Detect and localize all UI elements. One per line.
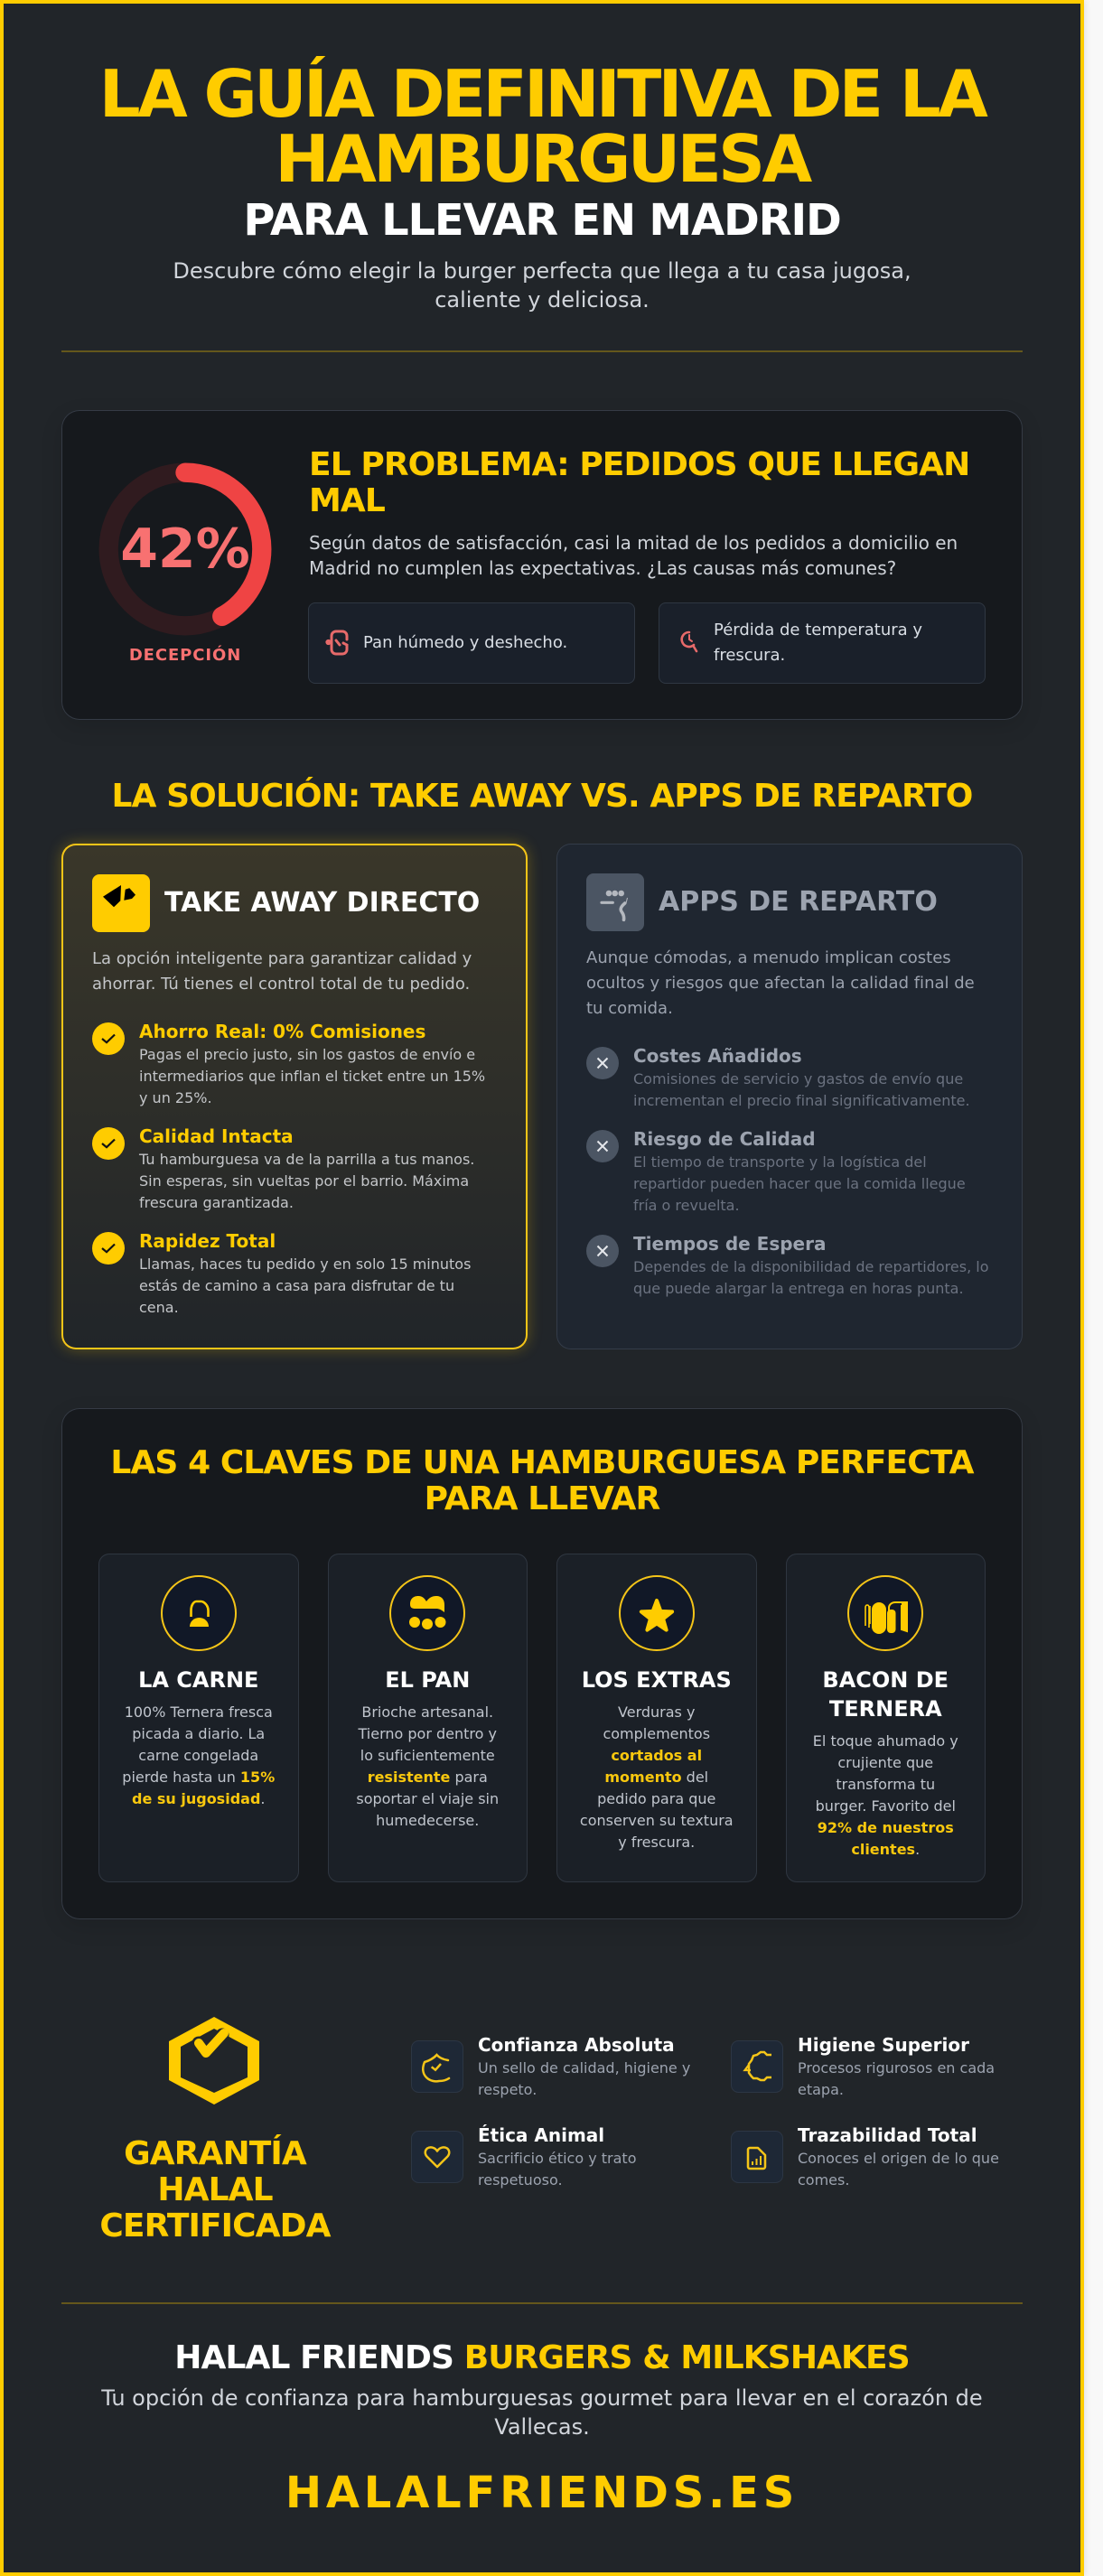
icon: take away: [92, 874, 150, 932]
feature: hygiene: [731, 2034, 995, 2098]
problem text: [309, 532, 958, 579]
heading: PARA LLEVAR: [425, 1480, 659, 1517]
benefit: speed: estás de camino a casa para disfrutar de tu: [139, 1277, 454, 1294]
drawback: costs: [586, 1045, 970, 1109]
cause card: temperature: [659, 602, 986, 684]
card: meat: LA CARNE: [138, 1667, 258, 1693]
feature: hygiene: Higiene Superior: [798, 2034, 969, 2056]
benefit: quality: Tu hamburguesa va de la parrilla a tus manos.: [139, 1151, 474, 1168]
intro: tu comida.: [586, 999, 673, 1018]
heading: TAKE AWAY DIRECTO: [164, 887, 480, 919]
icon: wet bun: [325, 630, 349, 656]
feature: hygiene: Procesos rigurosos en cada: [798, 2059, 995, 2077]
card: bun: resistente para: [368, 1769, 488, 1786]
card: bun: soportar el viaje sin: [356, 1790, 499, 1807]
card: meat: de su jugosidad.: [132, 1790, 265, 1807]
halal heading: HALAL: [157, 2171, 273, 2208]
header: [99, 56, 988, 313]
feature: ethics: Sacrificio ético y trato: [478, 2150, 636, 2167]
benefit: savings: Pagas el precio justo, sin los gastos de envío e: [139, 1046, 475, 1063]
donut chart: 42%: [99, 462, 271, 636]
halal heading: [99, 2134, 331, 2245]
title: LA GUÍA DEFINITIVA DE LA: [99, 56, 985, 132]
card: extras: conserven su textura: [580, 1812, 734, 1829]
card: extras: LOS EXTRAS: [582, 1667, 732, 1693]
problem text: Madrid no cumplen las expectativas. ¿Las causas más comunes?: [309, 557, 896, 579]
feature: traceability: comes.: [798, 2171, 849, 2189]
card: bun: humedecerse.: [376, 1812, 479, 1829]
benefit: savings: [92, 1021, 485, 1106]
panel: delivery apps: [556, 844, 1023, 1349]
intro: ocultos y riesgos que afectan la calidad final de: [586, 974, 975, 993]
feature: traceability: Trazabilidad Total: [798, 2124, 977, 2146]
website: HALALFRIENDS.ES: [285, 2468, 799, 2518]
benefit: speed: [92, 1230, 471, 1316]
drawback: quality risk: repartidor pueden hacer que la comida llegue: [633, 1175, 966, 1192]
benefit: speed: Rapidez Total: [139, 1230, 276, 1252]
intro text: Descubre cómo elegir la burger perfecta que llega a tu casa jugosa,: [173, 258, 911, 284]
card: bacon: 92% de nuestros: [818, 1819, 954, 1836]
cause card: wet bun: [308, 602, 635, 684]
feature: hygiene: etapa.: [798, 2081, 844, 2098]
card: bun: lo suficientemente: [360, 1747, 495, 1764]
problem heading: [309, 446, 969, 519]
benefit: speed: Llamas, haces tu pedido y en solo 15 minutos: [139, 1255, 471, 1273]
drawback: waiting: Tiempos de Espera: [633, 1233, 826, 1255]
stat label: DECEPCIÓN: [129, 646, 241, 665]
benefit: quality: Calidad Intacta: [139, 1125, 294, 1147]
feature: ethics: [411, 2124, 636, 2189]
benefit: quality: [92, 1125, 474, 1211]
intro: ahorrar. Tú tienes el control total de tu pedido.: [92, 975, 470, 994]
icon: delivery apps: [586, 873, 644, 931]
heading: APPS DE REPARTO: [659, 886, 938, 918]
intro: [586, 948, 975, 1018]
card: bacon: burger. Favorito del: [816, 1797, 956, 1815]
heading: [110, 1444, 974, 1517]
drawback: quality risk: Riesgo de Calidad: [633, 1128, 816, 1150]
icon: clock: [680, 630, 697, 652]
drawback: costs: Comisiones de servicio y gastos de envío que: [633, 1070, 963, 1087]
problem heading: MAL: [309, 482, 385, 519]
card: bacon: El toque ahumado y: [813, 1732, 958, 1750]
card: extras: y frescura.: [618, 1834, 695, 1851]
drawback: waiting: Dependes de la disponibilidad de repartidores, lo: [633, 1258, 988, 1275]
footer text: Tu opción de confianza para hamburguesas gourmet para llevar en el corazón de: [101, 2385, 983, 2411]
feature: trust: Confianza Absoluta: [478, 2034, 675, 2056]
card: meat: carne congelada: [138, 1747, 258, 1764]
halal heading: GARANTÍA: [124, 2135, 306, 2172]
panel: four keys: [61, 1408, 1023, 1919]
cause text: frescura.: [714, 646, 785, 665]
footer text: Vallecas.: [494, 2414, 590, 2440]
drawback: waiting: que puede alargar la entrega en horas punta.: [633, 1280, 964, 1297]
drawback: quality risk: fría o revuelta.: [633, 1197, 740, 1214]
benefit: quality: Sin esperas, sin vueltas por el barrio. Máxima: [139, 1172, 469, 1190]
card: extras: Verduras y: [618, 1703, 695, 1721]
drawback: costs: incrementan el precio final significativamente.: [633, 1092, 970, 1109]
intro text: [173, 258, 911, 313]
panel: problem: [61, 410, 1023, 720]
title: [99, 56, 988, 197]
feature: trust: Un sello de calidad, higiene y: [478, 2059, 690, 2077]
stat: 42%: 42%: [120, 518, 250, 581]
card: extras: [556, 1554, 757, 1882]
cause text: Pérdida de temperatura y: [714, 621, 922, 639]
benefit: savings: intermediarios que inflan el ticket entre un 15%: [139, 1068, 485, 1085]
drawback: waiting: [586, 1233, 988, 1297]
title: HAMBURGUESA: [275, 121, 809, 197]
card: bun: EL PAN: [385, 1667, 470, 1693]
benefit: savings: y un 25%.: [139, 1089, 212, 1106]
panel: take away: [61, 844, 528, 1349]
benefit: savings: Ahorro Real: 0% Comisiones: [139, 1021, 425, 1042]
card: meat: 100% Ternera fresca: [125, 1703, 273, 1721]
drawback: costs: Costes Añadidos: [633, 1045, 802, 1067]
card: meat: [98, 1554, 298, 1882]
card: bacon: [786, 1554, 986, 1882]
icon: halal badge: [169, 2017, 259, 2105]
problem text: Según datos de satisfacción, casi la mitad de los pedidos a domicilio en: [309, 532, 958, 554]
cause text: [714, 621, 922, 665]
card: extras: pedido para que: [597, 1790, 715, 1807]
card: bacon: BACON DE: [822, 1667, 949, 1693]
halal heading: CERTIFICADA: [99, 2207, 331, 2245]
section heading: solution: LA SOLUCIÓN: TAKE AWAY VS. APPS DE REPARTO: [111, 778, 973, 815]
card: extras: complementos: [603, 1725, 710, 1742]
feature: traceability: Conoces el origen de lo que: [798, 2150, 999, 2167]
brand line: HALAL FRIENDS BURGERS & MILKSHAKES: [174, 2339, 910, 2376]
heading: LAS 4 CLAVES DE UNA HAMBURGUESA PERFECTA: [110, 1444, 974, 1481]
card: bacon: transforma tu: [836, 1776, 935, 1793]
card: bacon: clientes.: [851, 1841, 920, 1858]
benefit: speed: cena.: [139, 1299, 179, 1316]
subtitle: PARA LLEVAR EN MADRID: [243, 195, 841, 246]
intro text: caliente y deliciosa.: [435, 287, 650, 313]
footer: [101, 2339, 983, 2518]
card: bun: Tierno por dentro y: [358, 1725, 497, 1742]
card: bacon: TERNERA: [829, 1696, 942, 1722]
feature: trust: [411, 2034, 690, 2098]
feature: ethics: Ética Animal: [478, 2124, 604, 2146]
intro: [92, 949, 472, 994]
card: meat: pierde hasta un 15%: [122, 1769, 275, 1786]
card: extras: cortados al: [611, 1747, 702, 1764]
card: meat: picada a diario. La: [132, 1725, 265, 1742]
feature: trust: respeto.: [478, 2081, 537, 2098]
drawback: quality risk: El tiempo de transporte y la logística del: [633, 1153, 927, 1171]
card: bun: Brioche artesanal.: [361, 1703, 493, 1721]
footer text: [101, 2385, 983, 2440]
intro: La opción inteligente para garantizar calidad y: [92, 949, 472, 968]
benefit: quality: frescura garantizada.: [139, 1194, 294, 1211]
drawback: quality risk: [586, 1128, 966, 1214]
card: bacon: crujiente que: [837, 1754, 933, 1771]
card: extras: momento del: [604, 1769, 708, 1786]
card: bun: [327, 1554, 528, 1882]
feature: ethics: respetuoso.: [478, 2171, 563, 2189]
problem heading: EL PROBLEMA: PEDIDOS QUE LLEGAN: [309, 446, 969, 483]
cause text: Pan húmedo y deshecho.: [363, 633, 567, 652]
intro: Aunque cómodas, a menudo implican costes: [586, 948, 951, 967]
feature: traceability: [731, 2124, 999, 2189]
